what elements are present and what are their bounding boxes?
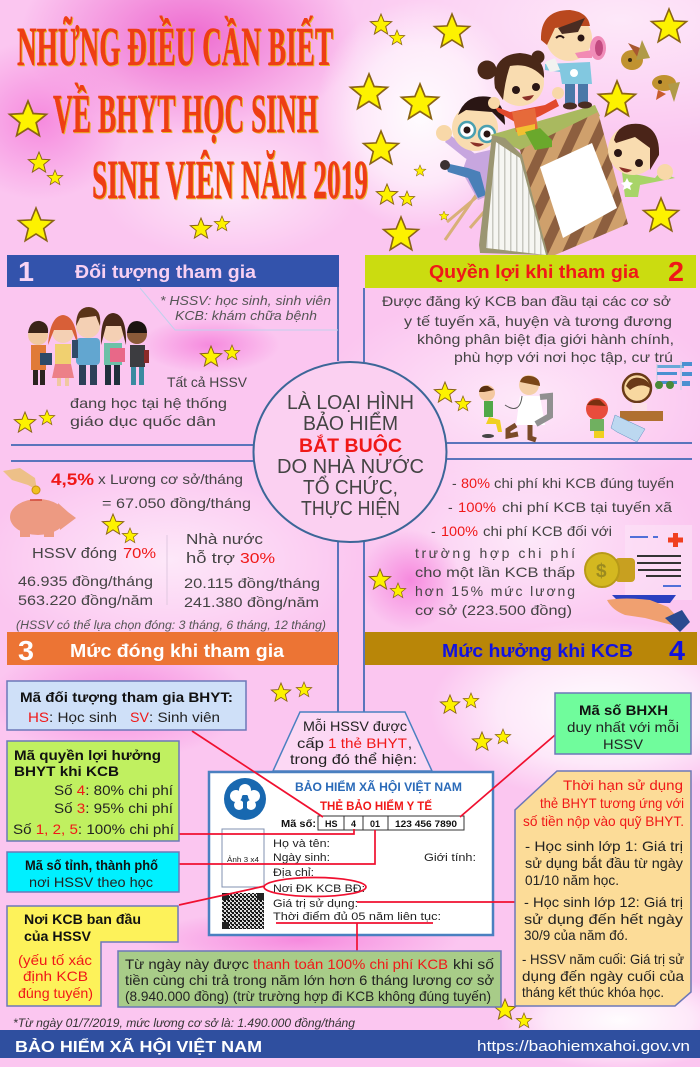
- panel 2 text: [382, 293, 674, 365]
- panel 2 text: không phân biệt địa giới hành chính,: [417, 331, 674, 347]
- health insurance card: [209, 772, 493, 935]
- centre circle: LÀ LOẠI HÌNH: [287, 391, 414, 414]
- panel 4 text: chi phí KCB đối với: [483, 523, 612, 539]
- callout: province code: Mã số tỉnh, thành phố: [25, 857, 158, 873]
- callout: social insurance number: Mã số BHXH: [579, 702, 668, 718]
- callout: full payment: (8.940.000 đồng) (trừ trường hợp đi KCB không đúng tuyến): [125, 988, 491, 1004]
- icon: coins, invoice and hand: [585, 525, 692, 632]
- health insurance card: Họ và tên:: [273, 838, 330, 850]
- callout: initial care place: của HSSV: [24, 928, 92, 944]
- illustration: children on a book: [436, 10, 680, 255]
- panel 2 header: Quyền lợi khi tham gia: [429, 262, 640, 282]
- title: VỀ BHYT HỌC SINH: [53, 83, 318, 144]
- panel 2 text: y tế tuyến xã, huyện và tương đương: [404, 313, 672, 329]
- centre circle: THỰC HIỆN: [301, 497, 400, 520]
- callout: benefit code: Số 3: 95% chi phí: [54, 800, 173, 816]
- panel 1 note: KCB: khám chữa bệnh: [175, 309, 317, 323]
- callout: social insurance number: duy nhất với mỗi: [567, 719, 679, 735]
- icon: five students: [28, 307, 149, 386]
- panel 3 text: HSSV đóng: [32, 545, 117, 562]
- birds: [621, 40, 680, 102]
- callout: social insurance number: [555, 693, 691, 754]
- photo placeholder: Ảnh 3 x4: [227, 855, 259, 864]
- health insurance card: Nơi ĐK KCB BĐ:: [273, 883, 365, 895]
- icon: nurse and sick child with health card: [586, 361, 692, 442]
- icon: piggy bank and coin: [3, 468, 76, 537]
- callout: benefit code: Số 1, 2, 5: 100% chi phí: [13, 821, 174, 837]
- callout: card intro: trong đó thể hiện:: [290, 751, 417, 767]
- callout: card validity: - HSSV năm cuối: Giá trị sử: [522, 951, 684, 967]
- callout: social insurance number: HSSV: [603, 736, 644, 752]
- health insurance card: Giới tính:: [424, 852, 476, 864]
- footer bar: BẢO HIỂM XÃ HỘI VIỆT NAM: [15, 1036, 262, 1056]
- panel 1 text: đang học tại hệ thống: [70, 395, 227, 411]
- panel 3 text: 241.380 đồng/năm: [184, 594, 319, 610]
- callout: benefit code: Mã quyền lợi hưởng: [14, 747, 161, 763]
- panel 3 text: 563.220 đồng/năm: [18, 592, 153, 608]
- callout: benefit code: BHYT khi KCB: [14, 763, 119, 779]
- panel 4 text: trường hợp chi phí: [415, 545, 575, 561]
- callout: card validity: - Học sinh lớp 12: Giá trị: [524, 894, 683, 910]
- panel 2 text: phù hợp với nơi học tập, cư trú: [454, 349, 673, 365]
- panel 4 text: cho một lần KCB thấp: [415, 564, 575, 580]
- panel 2 header: 2: [668, 256, 684, 287]
- ladder: [445, 175, 490, 240]
- panel 1 text: [70, 374, 248, 429]
- callout: benefit code: [7, 741, 179, 841]
- icon: coins, invoice and hand: $: [596, 561, 607, 582]
- callout: initial care place: Nơi KCB ban đầu: [24, 911, 141, 927]
- card number table: 123 456 7890: [395, 819, 457, 829]
- icon: social insurance logo: [224, 778, 266, 820]
- callout: initial care place: định KCB: [23, 968, 88, 984]
- centre circle: DO NHÀ NƯỚC: [277, 455, 424, 478]
- panel 4 text: -: [448, 499, 453, 515]
- callout: card intro: ,: [408, 735, 412, 751]
- health insurance card: Địa chỉ:: [273, 867, 314, 879]
- panel 3 text: = 67.050 đồng/tháng: [102, 495, 251, 511]
- panel 1 text: giáo dục quốc dân: [70, 413, 216, 429]
- callout: card validity: 30/9 của năm đó.: [524, 927, 628, 943]
- callout: full payment: Từ ngày này được: [125, 956, 249, 972]
- red connector lines: [179, 731, 555, 951]
- panel 4 text: -: [452, 475, 457, 491]
- callout: card validity: sử dụng đến hết ngày: [524, 911, 683, 927]
- callout: initial care place: [7, 906, 178, 1006]
- callout: card validity: thẻ BHYT tương ứng với: [540, 795, 684, 811]
- boy with megaphone: [541, 10, 606, 110]
- health insurance card: Thời điểm đủ 05 năm liên tục:: [273, 911, 441, 923]
- health insurance card: BẢO HIỂM XÃ HỘI VIỆT NAM: [295, 781, 462, 794]
- callout: participant code: : Sinh viên: [149, 709, 220, 725]
- footer bar: https://baohiemxahoi.gov.vn: [477, 1039, 690, 1055]
- panel 3 header: Mức đóng khi tham gia: [70, 641, 285, 661]
- panel 3 header: 3: [18, 635, 34, 666]
- callout: participant code: SV: [130, 709, 150, 725]
- centre circle: [254, 362, 446, 542]
- panel 1 header: [7, 255, 339, 287]
- centre circle: TỔ CHỨC,: [303, 475, 398, 499]
- panel 3 text: [16, 470, 326, 632]
- card number table: [318, 816, 464, 830]
- health insurance card: Giá trị sử dụng:: [273, 898, 358, 910]
- panel 1 header: 1: [18, 256, 34, 287]
- callout: card intro: [273, 712, 432, 771]
- callout: card validity: [515, 771, 691, 1006]
- callout: participant code: HS: [28, 709, 49, 725]
- panel 3 header: [7, 632, 338, 666]
- callout: full payment: thanh toán 100% chi phí KCB: [253, 956, 448, 972]
- panel 3 text: hỗ trợ: [186, 550, 235, 567]
- callout: card validity: số tiền nộp vào quỹ BHYT.: [523, 813, 684, 829]
- callout: card intro: Mỗi HSSV được: [303, 718, 407, 734]
- health insurance card: Ngày sinh:: [273, 852, 330, 864]
- callout: province code: nơi HSSV theo học: [29, 874, 153, 890]
- book: [490, 105, 600, 150]
- health insurance card: THẺ BẢO HIỂM Y TẾ: [320, 800, 432, 813]
- panel 4 text: 100%: [458, 499, 496, 515]
- panel 3 text: 70%: [123, 545, 156, 562]
- callout: initial care place: đúng tuyến): [18, 985, 93, 1001]
- card number table: HS: [325, 819, 338, 829]
- title: [17, 16, 368, 210]
- panel 2 text: Được đăng ký KCB ban đầu tại các cơ sở: [382, 293, 671, 309]
- panel 3 text: 30%: [240, 550, 275, 567]
- callout: card intro: cấp: [297, 735, 324, 751]
- panel 3 text: 4,5%: [51, 470, 94, 489]
- panel 1 note: [160, 294, 331, 323]
- panel 4 text: cơ sở (223.500 đồng): [415, 602, 572, 618]
- panel 1 text: Tất cả HSSV: [167, 374, 248, 390]
- footnote: *Từ ngày 01/7/2019, mức lương cơ sở là: 1.490.000 đồng/tháng: [13, 1018, 356, 1030]
- footer bar: [0, 1030, 700, 1058]
- callout: province code: [7, 852, 179, 892]
- callout: benefit code: Số 4: 80% chi phí: [54, 782, 173, 798]
- panel 3 text: x Lương cơ sở/tháng: [98, 471, 243, 487]
- card number table: 01: [370, 819, 380, 829]
- kid with glasses: [436, 96, 505, 200]
- callout: card validity: sử dụng bắt đầu từ ngày: [525, 855, 683, 871]
- callout: card validity: 01/10 năm học.: [525, 872, 619, 888]
- callout: participant code: Mã đối tượng tham gia BHYT:: [20, 689, 233, 705]
- photo placeholder: [222, 829, 264, 887]
- icon: doctor examining child: [479, 375, 550, 440]
- panel 3 text: Nhà nước: [186, 531, 264, 548]
- panel 4 text: 100%: [441, 523, 478, 539]
- panel 4 text: -: [431, 523, 436, 539]
- callout: full payment: tiền cùng chi trả trong năm lớn hơn 6 tháng lương cơ sở: [125, 972, 494, 988]
- panel 2 header: [365, 255, 696, 288]
- callout: card validity: - Học sinh lớp 1: Giá trị: [525, 838, 683, 854]
- panel 4 header: [365, 632, 697, 666]
- centre circle: BẮT BUỘC: [299, 435, 402, 457]
- callout: card intro: 1 thẻ BHYT: [328, 735, 407, 751]
- callout: participant code: : Học sinh: [49, 709, 117, 725]
- panel 1 note: * HSSV: học sinh, sinh viên: [160, 294, 331, 308]
- panel 1 header: Đối tượng tham gia: [75, 262, 257, 282]
- callout: card validity: tháng kết thúc khóa học.: [522, 984, 664, 1000]
- boy on the right: [608, 124, 675, 197]
- callout: participant code: [7, 681, 246, 730]
- panel 4 text: chi phí KCB tại tuyến xã: [502, 499, 672, 515]
- title: NHỮNG ĐIỀU CẦN BIẾT: [17, 16, 333, 77]
- girl with buns: [478, 50, 564, 150]
- card number table: 4: [351, 819, 356, 829]
- panel 4 header: Mức hưởng khi KCB: [442, 641, 633, 661]
- callout: full payment: khi số: [453, 956, 494, 972]
- callout: full payment: [118, 951, 501, 1007]
- centre circle: BẢO HIỂM: [303, 412, 398, 435]
- panel 3 text: 20.115 đồng/tháng: [184, 575, 320, 591]
- section frame lines: [11, 287, 692, 712]
- panel 4 header: 4: [669, 635, 685, 666]
- panel 4 text: hơn 15% mức lương: [415, 583, 575, 599]
- panel 3 text: 46.935 đồng/tháng: [18, 573, 153, 589]
- text: SINH VIÊN NĂM 2019: [92, 149, 368, 210]
- callout: initial care place: (yếu tố xác: [18, 952, 92, 968]
- panel 4 text: [415, 475, 674, 618]
- panel 4 text: 80%: [461, 475, 490, 491]
- panel 4 text: chi phí khi KCB đúng tuyến: [494, 475, 674, 491]
- QR code: [222, 893, 264, 929]
- callout: card validity: dụng đến ngày cuối của: [522, 968, 684, 984]
- callout: card validity: Thời hạn sử dụng: [563, 777, 683, 793]
- panel 3 text: (HSSV có thể lựa chọn đóng: 3 tháng, 6 tháng, 12 tháng): [16, 620, 326, 632]
- health insurance card: Mã số:: [281, 818, 316, 830]
